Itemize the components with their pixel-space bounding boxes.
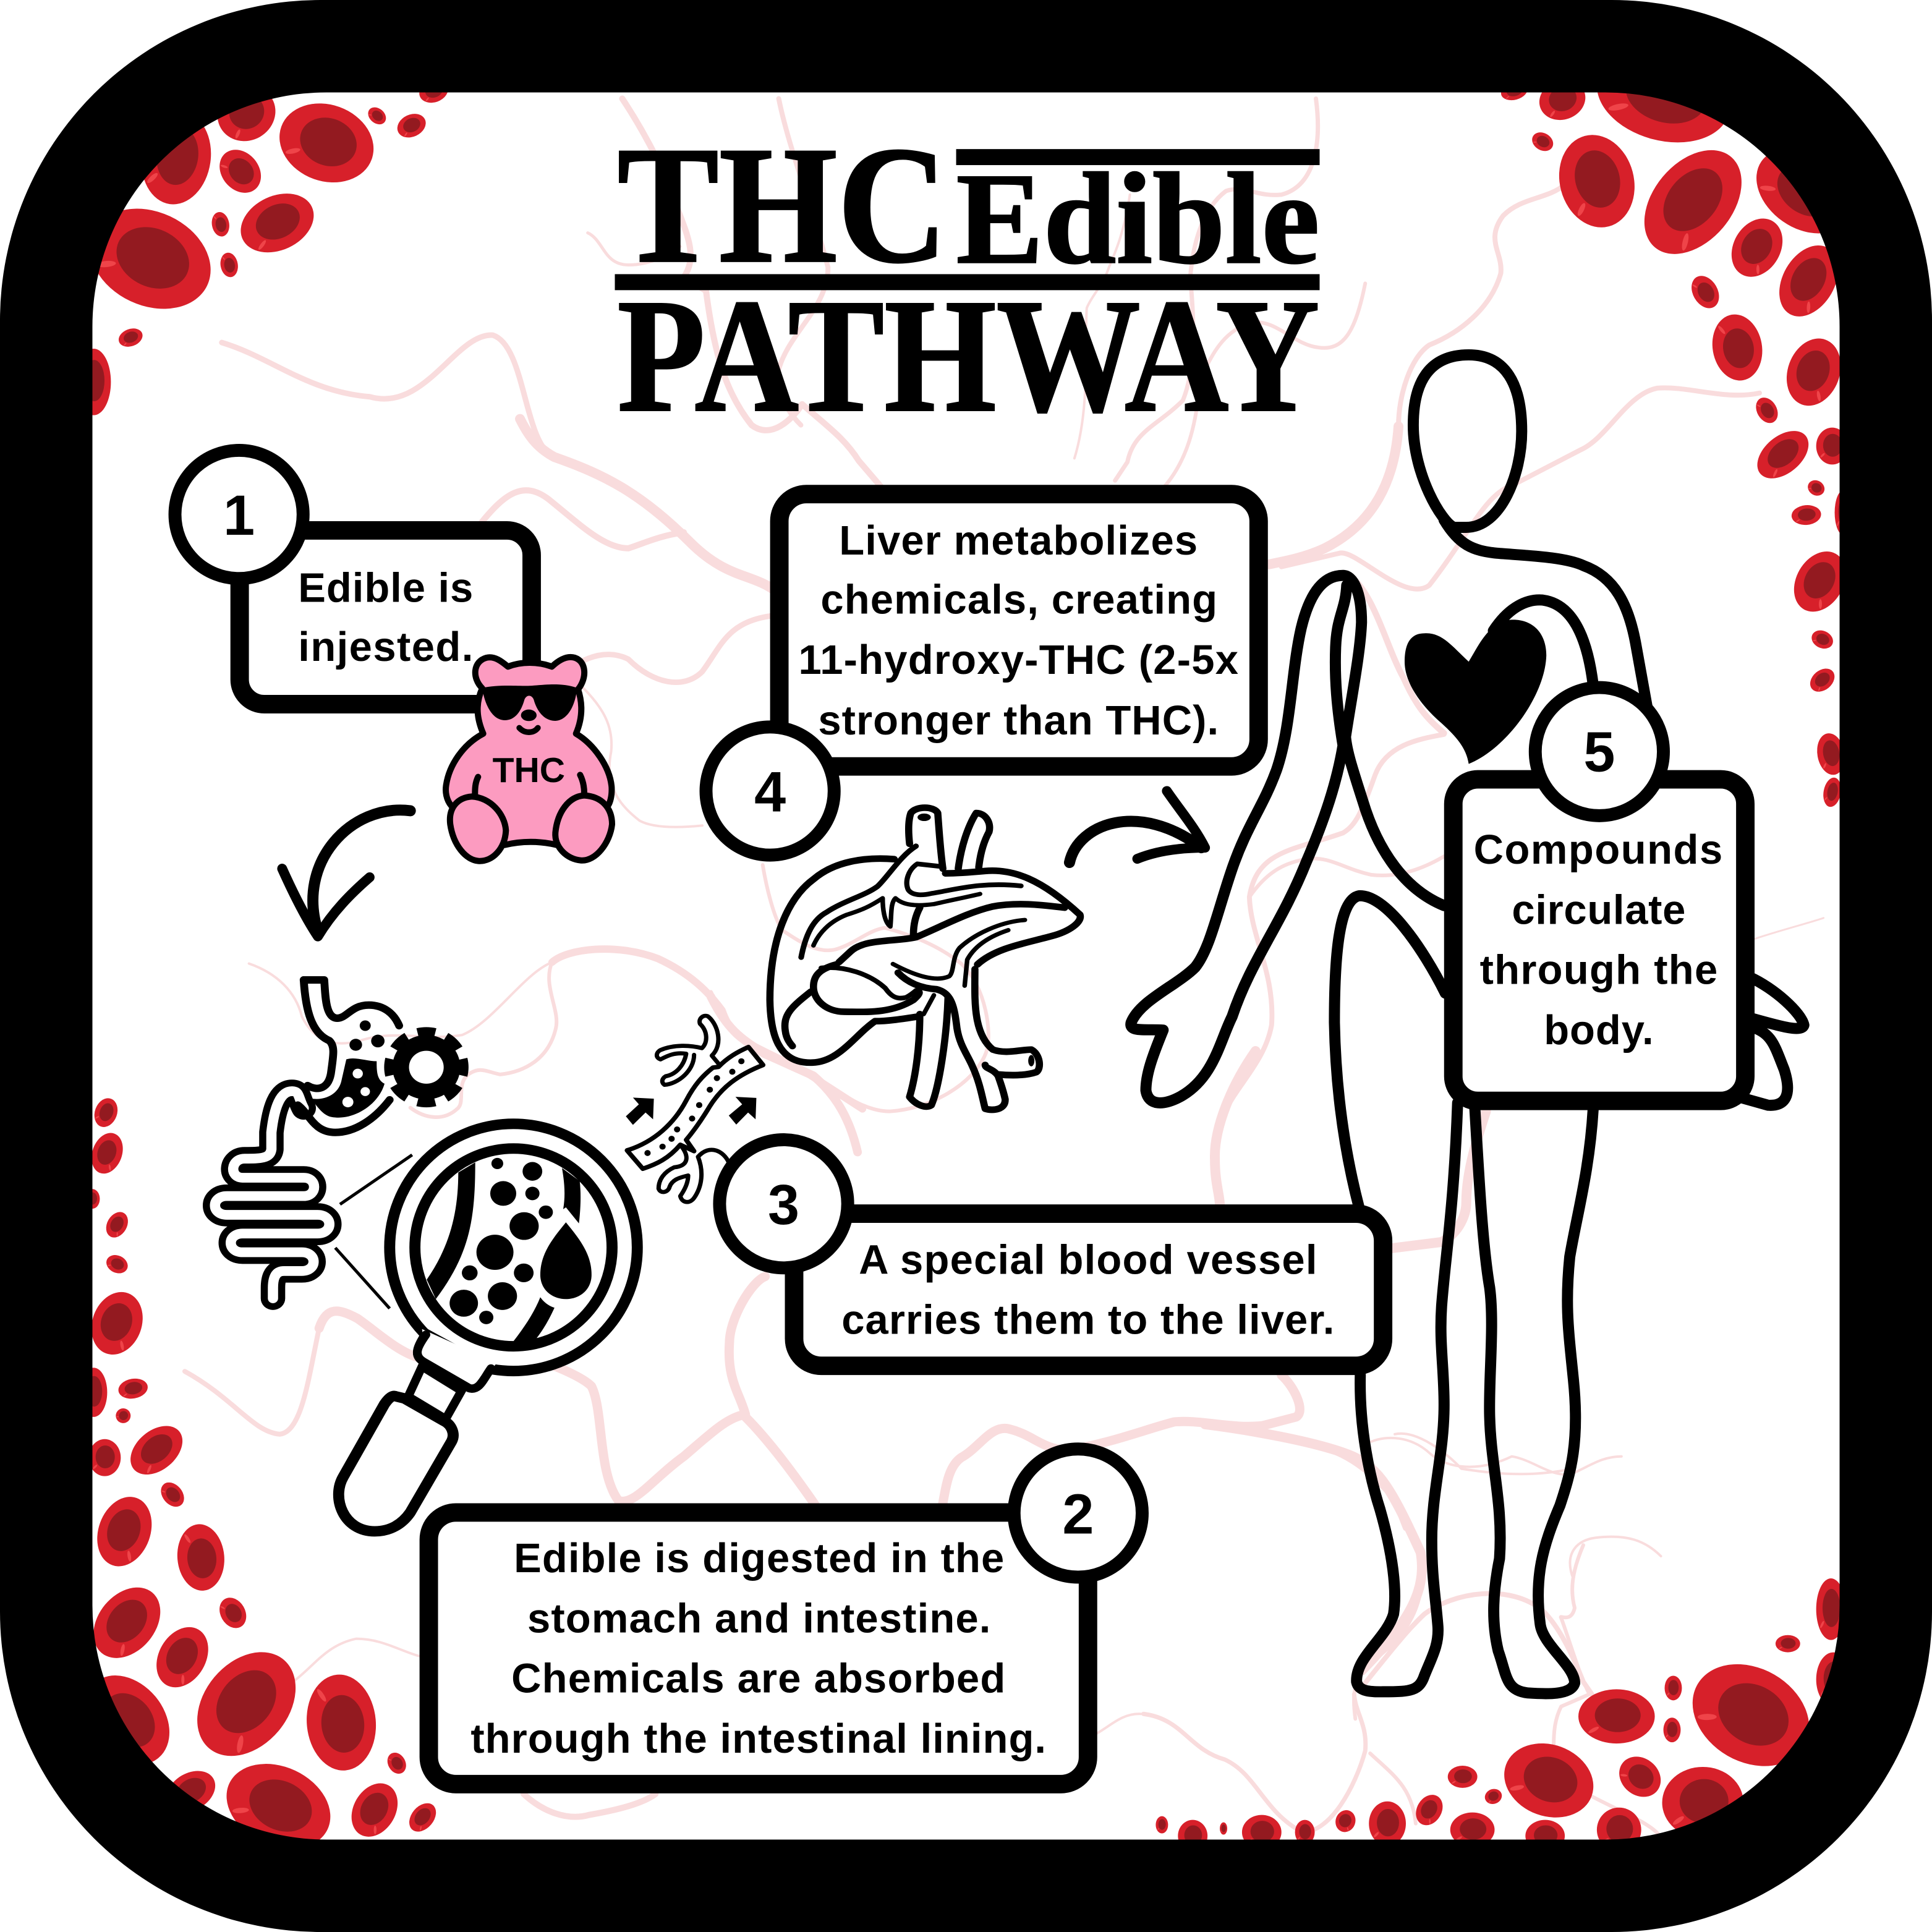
shoulder line (1444, 520, 1648, 709)
step 4: text: Liver metabolizes (839, 517, 1198, 564)
step 2: number (1014, 1449, 1142, 1577)
right leg (1475, 1109, 1593, 1694)
step 5: text: circulate (1512, 887, 1685, 934)
waist (1334, 896, 1445, 1207)
icon: pink gummy bear: THC (493, 751, 565, 790)
blood cells: bottom right corner (1155, 1578, 1850, 1852)
blood cells: top right corner (1499, 36, 1868, 808)
step 4: text (798, 517, 1238, 744)
icon: heart (1405, 619, 1546, 764)
step 1: text: Edible is (298, 565, 473, 611)
step 1: text (298, 565, 473, 670)
title: Edible (956, 147, 1319, 291)
arrow: liver to body (1070, 791, 1205, 862)
step 5: text: through the (1480, 947, 1717, 993)
step 3: box (794, 1214, 1383, 1366)
step 2: box (429, 1512, 1088, 1784)
arrow: bear to stomach (282, 810, 411, 937)
step 1: number: 1 (223, 484, 255, 547)
step 4: text: stronger than THC). (818, 697, 1219, 744)
step 2: text (470, 1535, 1046, 1762)
icon: pink gummy bear (446, 657, 612, 861)
step 4: text: 11-hydroxy-THC (2-5x (798, 637, 1238, 683)
step 1: number (175, 450, 303, 579)
step 3: text: A special blood vessel (859, 1237, 1317, 1283)
step 4: box (780, 494, 1259, 767)
step 3: number (720, 1140, 848, 1268)
step 5: number: 5 (1583, 721, 1615, 784)
icon: magnifying glass showing intestinal lining (335, 1124, 637, 1531)
step 2: text: through the intestinal lining. (470, 1716, 1046, 1762)
inner arm curve (1493, 600, 1593, 685)
head (1413, 355, 1521, 527)
background: blood vessels (185, 98, 1824, 1836)
icon: liver (770, 807, 1080, 1110)
step 2: number: 2 (1062, 1483, 1094, 1546)
step 5: box (1453, 780, 1745, 1101)
step 3: text (841, 1237, 1334, 1343)
step 5: number (1535, 687, 1664, 815)
step 2: text: stomach and intestine. (527, 1596, 990, 1642)
title (615, 112, 1319, 446)
raised arm and side (1131, 576, 1444, 1103)
step 3: text: carries them to the liver. (841, 1296, 1334, 1343)
step 4: number (706, 727, 834, 855)
right hand (1737, 977, 1804, 1105)
step 5: text (1474, 827, 1722, 1053)
step 2: text: Chemicals are absorbed (511, 1655, 1005, 1701)
step 4: number: 4 (754, 760, 786, 823)
title: THC (617, 112, 948, 298)
icon: portal blood vessel (626, 1016, 763, 1202)
icon: gear (390, 1033, 462, 1102)
step 1: text: injested. (298, 624, 473, 670)
step 1: box (240, 530, 532, 704)
blood cells: top left corner (74, 75, 451, 415)
step 2: text: Edible is digested in the (514, 1535, 1004, 1581)
step 5: text: Compounds (1474, 827, 1722, 873)
step 4: text: chemicals, creating (820, 577, 1217, 623)
icon: stomach and intestine (215, 980, 399, 1298)
blood cells: bottom left corner (67, 1095, 441, 1865)
left leg (1356, 1103, 1458, 1692)
step 3: number: 3 (768, 1173, 799, 1236)
step 5: text: body. (1544, 1007, 1654, 1053)
title: PATHWAY (617, 266, 1319, 446)
human body outline (1131, 355, 1804, 1694)
